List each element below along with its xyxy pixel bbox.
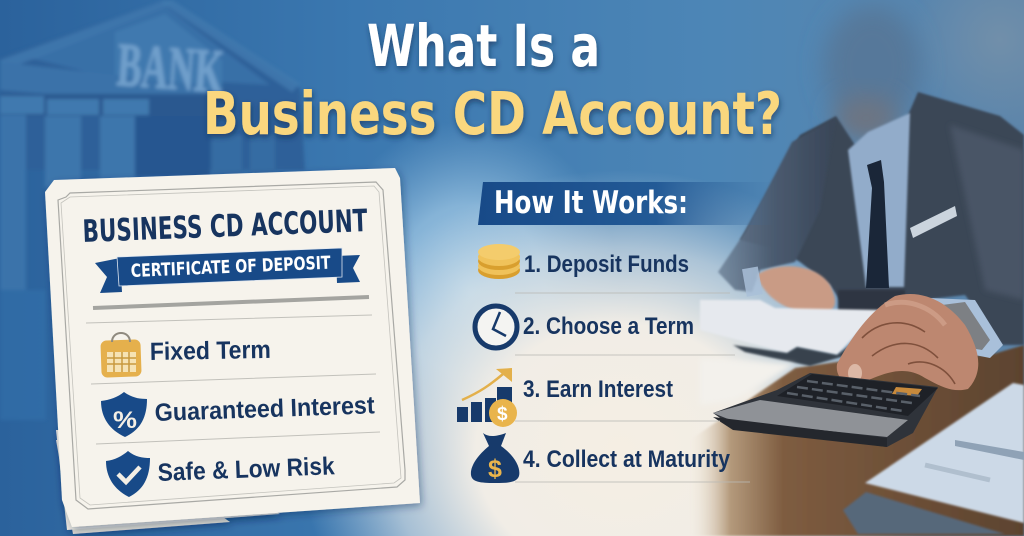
stacked back pages <box>56 430 280 534</box>
shirt <box>848 113 910 287</box>
suit <box>740 92 1024 345</box>
icon: money bag <box>471 433 519 483</box>
bank sign: BANK <box>115 31 226 106</box>
cuff and watch <box>930 298 1003 358</box>
dark desk items <box>838 290 905 312</box>
icon: money bag: $ <box>488 455 502 483</box>
icon: percent shield: % <box>113 407 137 434</box>
icon: coin stack <box>478 244 520 279</box>
step 4: 4. Collect at Maturity <box>523 446 731 473</box>
heading banner: How It Works: <box>494 185 688 221</box>
icon: percent shield <box>101 392 147 437</box>
feature: safe and low risk: Safe & Low Risk <box>157 452 335 487</box>
title: Business CD Account? <box>203 79 782 148</box>
left hand <box>757 266 835 314</box>
center papers <box>700 300 880 355</box>
pocket square <box>910 206 957 238</box>
panel: how it works <box>457 182 775 483</box>
card heading: BUSINESS CD ACCOUNT <box>82 203 368 250</box>
title: What Is a <box>367 12 600 80</box>
icon: clock <box>475 306 517 348</box>
businessman at desk photo <box>690 6 1024 536</box>
icon: growth chart <box>457 368 517 427</box>
head <box>824 6 920 126</box>
right hand <box>837 294 978 390</box>
front page <box>45 168 420 527</box>
step 2: 2. Choose a Term <box>523 313 694 340</box>
icon: growth chart: $ <box>497 404 508 425</box>
icon: check shield <box>106 451 150 497</box>
desk <box>690 345 1024 536</box>
ribbon: CERTIFICATE OF DEPOSIT <box>130 253 332 282</box>
ribbon <box>95 248 360 293</box>
feature: guaranteed interest: Guaranteed Interest <box>154 391 376 427</box>
document bottom right <box>843 492 1005 534</box>
step 1: 1. Deposit Funds <box>524 251 689 278</box>
title <box>203 12 782 148</box>
heading banner <box>478 182 775 225</box>
tie <box>866 160 889 288</box>
bank building illustration <box>0 0 305 420</box>
decorative border <box>58 182 405 509</box>
step 3: 3. Earn Interest <box>523 376 673 403</box>
icon: calendar <box>100 333 142 378</box>
feature: fixed term: Fixed Term <box>150 336 271 366</box>
panel: Business CD Account certificate card <box>45 168 420 534</box>
calculator <box>713 373 938 447</box>
